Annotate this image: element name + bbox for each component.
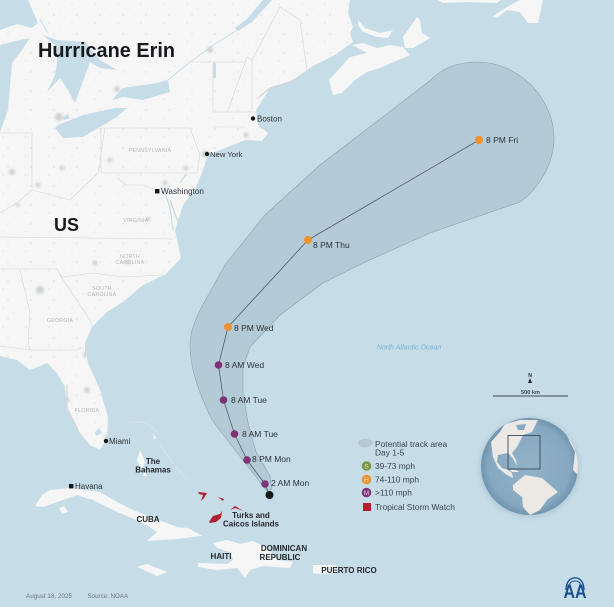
point: 8 AM Tue: 8 AM Tue [242, 429, 278, 439]
Great Lakes and St Lawrence [0, 0, 272, 436]
tropical storm watch areas [198, 492, 244, 523]
country labels: Caribbean: DOMINICAN [261, 544, 307, 553]
point: 8 PM Wed: 8 PM Wed [234, 323, 274, 333]
country labels: Caribbean: Caicos Islands [223, 520, 280, 528]
legend: S: S [364, 464, 369, 470]
legend [359, 439, 455, 512]
land texture: fine settlement dots [0, 0, 354, 450]
state labels: PENNSYLVANIA [129, 148, 172, 154]
land: Hispaniola [198, 540, 293, 578]
land: small Bahamas islands [137, 432, 156, 476]
point: 8 AM Wed: 8 AM Wed [225, 360, 264, 370]
country labels: Caribbean: Bahamas [135, 466, 171, 474]
locator globe [480, 418, 580, 518]
legend: M: >110 mph [375, 488, 412, 498]
urban blotches [9, 47, 248, 439]
north arrow and scale bar: N [528, 373, 532, 379]
state labels: GEORGIA [47, 318, 73, 324]
coastal urban stipple [67, 72, 307, 430]
land: north shore [438, 0, 500, 3]
date: August 18, 2025 [26, 593, 72, 600]
state labels: FLORIDA [75, 408, 100, 414]
land: US and Canada mainland [0, 0, 353, 450]
country labels: Caribbean: REPUBLIC [260, 553, 301, 562]
land: Nova Scotia [329, 43, 410, 95]
point: 8 PM Fri: 8 PM Fri [486, 135, 518, 145]
state labels: SOUTH [92, 286, 112, 292]
Bahamas banks [130, 422, 187, 480]
state labels: NORTH [120, 254, 140, 260]
current position [266, 491, 274, 499]
land: Prince Edward Island [358, 20, 393, 38]
point: 8 PM Thu [304, 236, 350, 250]
legend: track area: Day 1-5 [375, 448, 405, 458]
state labels [47, 148, 172, 414]
north arrow and scale bar [493, 373, 568, 396]
track points [215, 135, 518, 499]
rivers and bays [40, 19, 237, 230]
land: Cuba [35, 488, 202, 541]
title: Hurricane Erin [38, 40, 175, 62]
logo: AA: AA [564, 582, 587, 603]
point: 8 PM Mon: 8 PM Mon [252, 454, 291, 464]
point: 2 AM Mon: 2 AM Mon [271, 478, 310, 488]
country labels: Caribbean [135, 457, 377, 575]
forecast cone: potential track area [190, 62, 554, 493]
city: Miami: Miami [109, 437, 131, 446]
legend: H: H [364, 477, 369, 484]
legend: track area: Potential track area [375, 439, 447, 449]
legend: tropical storm watch: Tropical Storm Watch [375, 502, 455, 512]
country labels: Caribbean: HAITI [211, 552, 231, 561]
north arrow and scale bar: 500 km [521, 390, 540, 396]
storm track line [218, 140, 479, 495]
land: Jamaica [137, 564, 167, 576]
city: Boston: Boston [257, 114, 282, 124]
state labels: VIRGINIA [123, 218, 149, 224]
land: Newfoundland [492, 0, 543, 23]
country labels: Caribbean: CUBA [136, 515, 160, 524]
country labels: Caribbean: PUERTO RICO [321, 566, 377, 575]
country labels: Caribbean: The [146, 457, 161, 466]
legend: M: M [364, 490, 369, 497]
land: Puerto Rico [313, 565, 337, 574]
land: Isle of Youth [59, 506, 68, 514]
state labels: CAROLINA [116, 260, 145, 266]
ocean label: North Atlantic Ocean [377, 344, 441, 352]
legend: track area [359, 439, 447, 458]
legend: S: 39-73 mph [375, 461, 415, 471]
city: Havana: Havana [75, 482, 103, 491]
country label: US: US [54, 215, 79, 235]
city: Washington: Washington [161, 187, 204, 196]
city: New York: New York [210, 150, 243, 159]
state labels: CAROLINA [88, 292, 117, 298]
source: Source: NOAA [88, 593, 129, 600]
legend: H: 74-110 mph [375, 474, 419, 484]
point: 8 AM Tue: 8 AM Tue [231, 395, 267, 405]
land: Cape Breton [403, 17, 430, 48]
country labels: Caribbean: Turks and [232, 511, 270, 520]
state borders [0, 7, 307, 350]
point: 8 PM Thu: 8 PM Thu [313, 240, 350, 250]
